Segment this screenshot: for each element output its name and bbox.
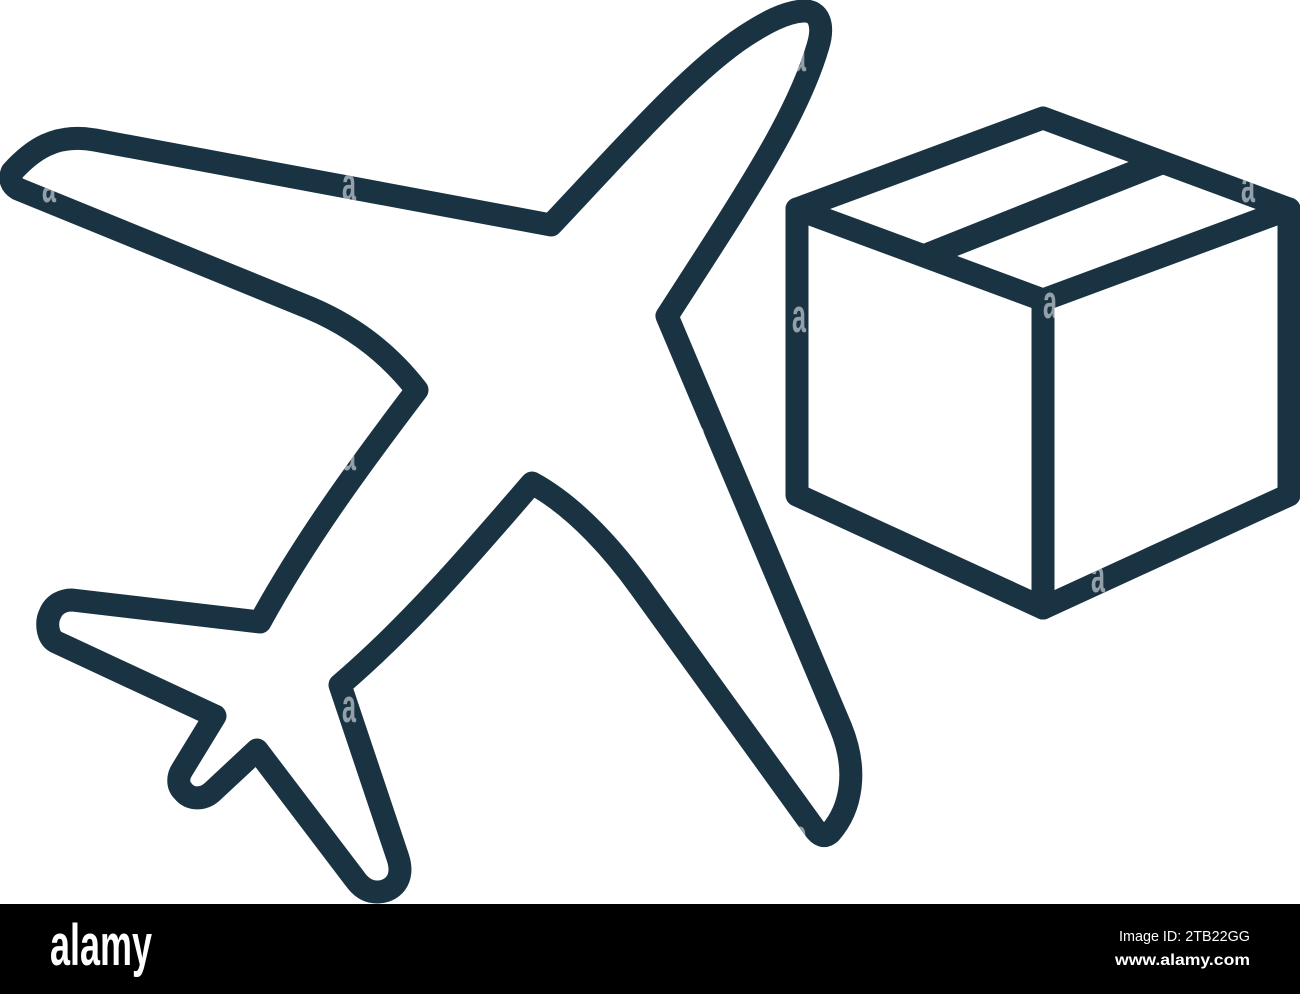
watermark marks: a	[792, 28, 806, 81]
watermark marks: a	[1043, 275, 1057, 328]
watermark marks: a	[692, 409, 706, 462]
icon: airplane outline	[11, 11, 851, 892]
footer image id: Image ID: 2TB22GG	[1119, 928, 1250, 945]
watermark marks: a	[342, 427, 356, 480]
box vertical front edge	[1032, 300, 1054, 608]
footer bar	[0, 904, 1300, 994]
watermark marks: a	[342, 157, 356, 210]
box outline	[797, 118, 1289, 608]
box tape	[910, 159, 1170, 262]
icon: parcel box	[797, 118, 1289, 608]
watermark marks: a	[342, 679, 356, 732]
watermark marks: a	[1241, 159, 1255, 212]
footer logo: alamy: alamy	[50, 913, 152, 978]
watermark marks: a	[42, 159, 56, 212]
footer website: www.alamy.com	[1114, 952, 1250, 969]
box top front edges	[797, 209, 1289, 300]
watermark marks: a	[792, 289, 806, 342]
watermark marks: a	[793, 809, 807, 862]
watermark marks	[42, 28, 1255, 862]
watermark marks: a	[1091, 549, 1105, 602]
